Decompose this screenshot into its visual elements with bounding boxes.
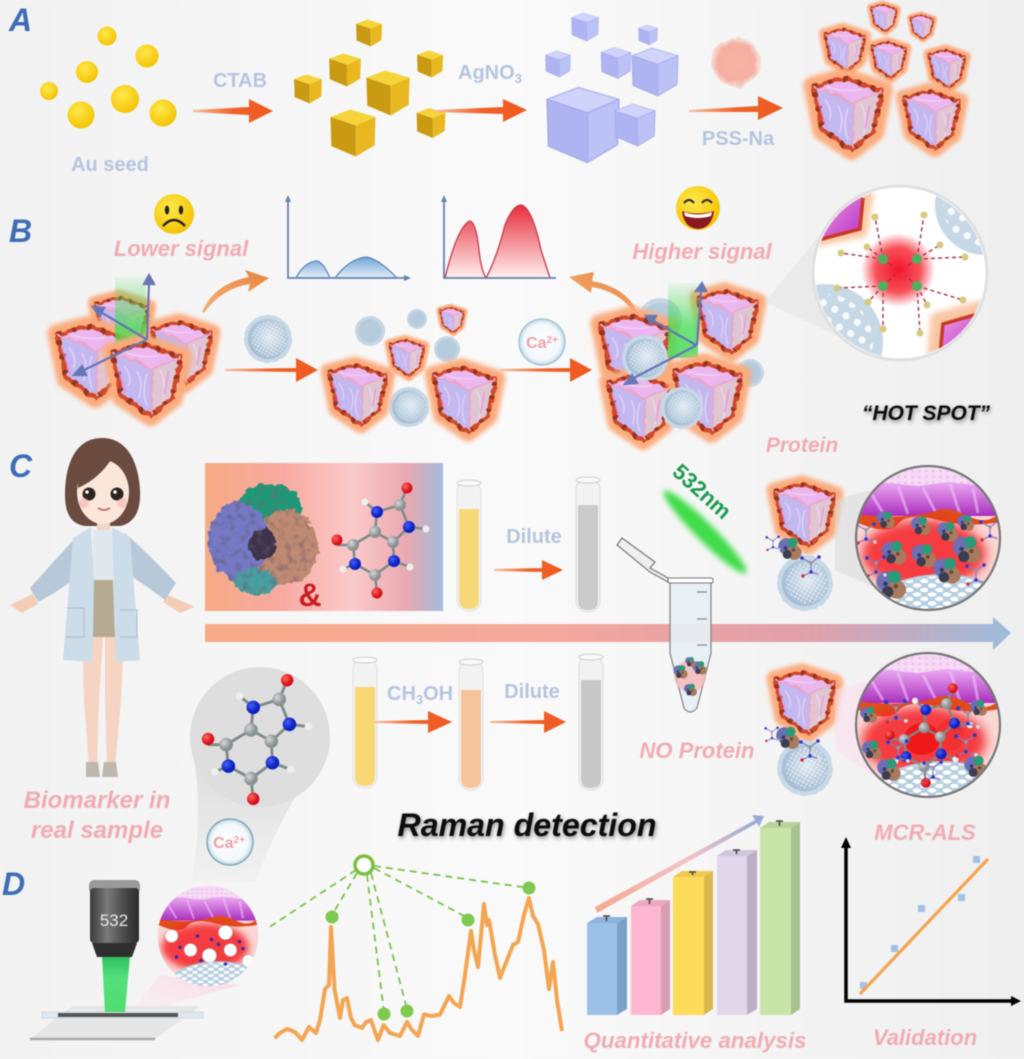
- Dilute label lower: Dilute: [504, 681, 560, 703]
- bar 4 lilac: [717, 850, 757, 1015]
- NO Protein label: NO Protein: [640, 738, 754, 763]
- validation plot: [841, 837, 1021, 1006]
- label D: D: [2, 866, 25, 902]
- section B: aggregation and hot spot: [9, 155, 1024, 442]
- AgNO3 label: AgNO: [458, 62, 515, 84]
- Protein label: Protein: [766, 434, 838, 457]
- corner cube top-left: [812, 188, 868, 242]
- HOT SPOT label: “HOT SPOT”: [862, 402, 990, 425]
- CTAB label: CTAB: [213, 70, 267, 92]
- icon: Ca2+ bubble: [519, 319, 565, 365]
- detail circle: protein: [854, 464, 1002, 612]
- CH3OH label: 3: [416, 692, 423, 707]
- high signal chart: [441, 195, 556, 278]
- section D: Raman detection: [2, 807, 1021, 1053]
- zoom cone lower: [835, 680, 880, 780]
- Biomarker in real sample label: Biomarker in: [24, 787, 170, 814]
- charges: [834, 212, 968, 336]
- curved arrow to high chart: [569, 272, 637, 312]
- AgNO3 label: 3: [515, 71, 522, 86]
- sphere top-right: [934, 196, 984, 256]
- aggregated cubes with spheres, high signal: [599, 283, 764, 442]
- objective lens 532: [89, 880, 140, 957]
- label B: B: [9, 213, 32, 249]
- dispersed cubes and spheres: [328, 307, 498, 434]
- main gradient arrow: [205, 617, 1011, 650]
- tube grey upper: [576, 477, 600, 612]
- arrow CTAB: [193, 99, 273, 123]
- bar chart: [587, 821, 800, 1015]
- arrow dilute upper: [494, 560, 563, 580]
- protein model: [208, 484, 318, 595]
- section A: nanoparticle synthesis: [8, 2, 966, 176]
- icon: Ca2+ bubble: 2+: [547, 335, 558, 346]
- Raman detection heading: Raman detection: [398, 807, 656, 843]
- porous sphere: [244, 315, 292, 363]
- corner cube bottom-right: [932, 305, 985, 362]
- CH3OH label: CH: [387, 683, 416, 705]
- laser beam 532 nm: [658, 485, 752, 579]
- Validation label: Validation: [873, 1025, 977, 1050]
- arrow dilute lower: [490, 711, 566, 733]
- label C: C: [9, 448, 33, 484]
- probe: no protein case: [764, 671, 836, 796]
- arrow PSS-Na: [689, 96, 783, 120]
- molecule circle: [190, 667, 330, 807]
- error caps: [603, 821, 783, 921]
- axes arrows: [625, 283, 706, 384]
- tube yellow: [457, 480, 481, 611]
- sphere bottom-left: [816, 284, 884, 356]
- arrow to hot-spot aggregate: [500, 358, 592, 382]
- arrow to dispersed particles: [225, 358, 318, 382]
- trend arrow: [595, 815, 764, 913]
- icon: Ca2+ bubble: 2+: [234, 835, 245, 846]
- bar 3 yellow: [673, 871, 713, 1015]
- icon: Ca2+ bubble: Ca: [526, 335, 547, 352]
- gold nanocubes: [294, 20, 445, 156]
- curved arrow to low chart: [202, 270, 269, 313]
- MCR-ALS label: MCR-ALS: [874, 820, 976, 845]
- icon: sad face: [154, 194, 194, 234]
- tube yellow lower: [353, 657, 377, 788]
- coated nanocubes: [812, 4, 966, 151]
- ampersand: &: [298, 577, 322, 613]
- green laser beam: [102, 956, 130, 1012]
- low signal chart: [285, 195, 411, 281]
- grey magnifier cone to molecule: [192, 750, 330, 882]
- 532nm label: 532nm: [668, 459, 736, 524]
- bar 2 pink: [631, 900, 670, 1015]
- axes arrows: [74, 275, 154, 375]
- Au seed label: Au seed: [71, 154, 149, 176]
- red hot zone: [861, 233, 935, 307]
- icon: Ca2+ bubble: Ca: [213, 835, 234, 852]
- dashed green leader lines: [268, 866, 529, 1012]
- gold seed dots: [40, 26, 176, 128]
- hot spot magnified circle: [812, 184, 988, 362]
- tube orange: [459, 659, 483, 790]
- Biomarker in real sample label: real sample: [31, 817, 163, 844]
- icon: Ca2+ bubble: [207, 819, 253, 865]
- laser cone to detail: [130, 975, 240, 1012]
- silver shell nanocubes: [546, 13, 678, 162]
- PSS polymer ball: [711, 37, 761, 87]
- Higher signal label: Higher signal: [632, 239, 773, 264]
- aggregated cubes, low signal: [56, 275, 213, 417]
- arrow AgNO3: [434, 99, 527, 122]
- CH3OH label: OH: [423, 683, 453, 705]
- Eppendorf tube: [617, 538, 713, 712]
- label A: A: [8, 2, 32, 38]
- objective lens 532: 532: [100, 911, 128, 930]
- Dilute label upper: Dilute: [506, 526, 562, 548]
- gradient panel with protein and molecule: [205, 463, 443, 613]
- icon: happy face: [676, 186, 720, 230]
- bar 5 green: [760, 822, 800, 1015]
- field lines: [837, 215, 965, 333]
- Lower signal label: Lower signal: [114, 236, 249, 261]
- Quantitative analysis label: Quantitative analysis: [584, 1028, 806, 1053]
- tube grey lower: [579, 654, 603, 790]
- detail circle with Ca ions: [158, 885, 258, 987]
- probe: protein case: [765, 483, 836, 611]
- detail circle: no protein: [854, 651, 1002, 799]
- section C: sample treatment: [9, 434, 1020, 882]
- arrow CH3OH: [375, 711, 452, 733]
- Raman spectrum: [274, 882, 562, 1040]
- molecule: [332, 482, 430, 598]
- zoom cone upper: [835, 490, 880, 590]
- ring marker: [355, 856, 373, 874]
- stage and slide: [30, 1006, 203, 1039]
- bar 1 blue: [587, 917, 627, 1015]
- character: scientist in lab coat: [10, 438, 195, 777]
- PSS-Na label: PSS-Na: [702, 128, 775, 150]
- magnifier cone: [765, 210, 885, 358]
